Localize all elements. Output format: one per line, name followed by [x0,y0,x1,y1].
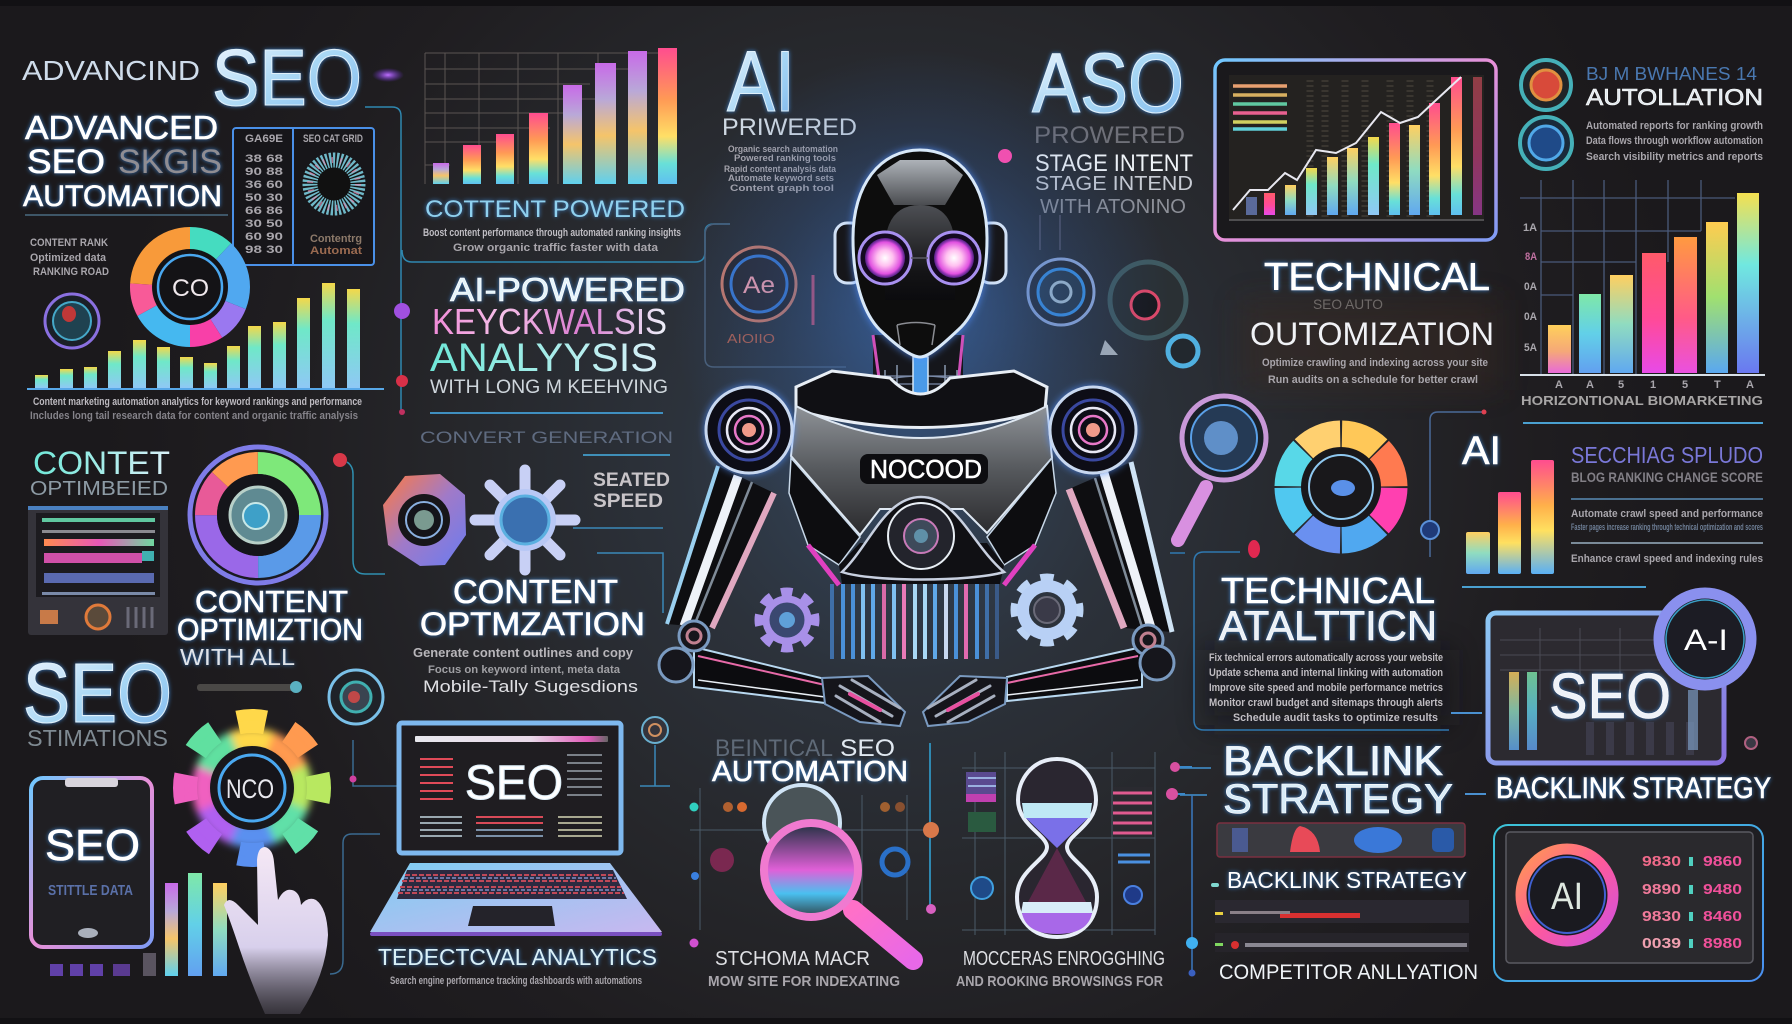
text block: chart caption: Content marketing automation analytics for keyword rankings and performance [33,396,362,408]
icon: dotted ring [310,160,358,208]
text block: content powered [423,196,685,254]
panel: data table with ring: 38 68 [245,153,283,165]
heading: content optimization centre: OPTMZATION [420,606,645,642]
panel: backlink strategy centre [1180,737,1478,984]
icon: purple blob [372,68,404,82]
heading: advanced seo automation [23,109,222,213]
icons: automation badges [1520,60,1572,169]
icon: AI magnifier ring [1659,593,1751,685]
text block: small centre-left copy: Automate keyword sets [728,173,834,183]
icon: octagon shield [383,474,466,566]
metric rows: 9480 [1703,881,1742,898]
panel: data table with ring [233,128,374,265]
heading: technical outomization: Optimize crawling and indexing across your site [1262,357,1488,369]
text block: chart caption [30,396,362,422]
text block: small centre-left copy [724,144,838,193]
bars [1246,77,1482,215]
text block: speed list [1571,442,1763,565]
text block: content powered: Boost content performance through automated ranking insights [423,227,681,239]
connector: bottom-right pink nodes [1166,762,1192,800]
text block: small centre-left copy: Powered ranking tools [734,153,836,163]
text block: technical analytics: TEDECTCVAL ANALYTICS [378,944,657,970]
text block: automation [1586,64,1763,163]
heading: content optimization centre: Generate content outlines and copy [413,645,634,660]
text block: automation: AUTOLLATION [1586,84,1763,110]
panel: AI circle left of robot: Ae [743,272,775,299]
robot: NOCOOD label: NOCOOD [870,454,982,484]
trend line [1233,77,1461,210]
text block: seated speed: SPEED [593,491,663,512]
chart: right rainbow bars: 5A [1524,342,1537,354]
text block: left notes: CONTENT RANK [30,237,108,249]
text block: left notes [30,237,109,278]
panel: phone: SEO [45,821,140,870]
robot: left forearm [694,647,825,703]
list left [966,772,996,899]
chart: right rainbow bars: 8A [1525,251,1537,263]
text block: chart caption right: HORIZONTIONAL BIOMARKETING [1521,393,1763,408]
title: ASO powered right: STAGE INTENT [1035,150,1193,177]
metric rows: 9830 [1642,908,1681,925]
panel: phone [31,778,152,947]
connector: centre branch [573,528,670,786]
panel: data table with ring: SEO CAT GRID [303,133,363,145]
illustration: hourglass with side lists [962,752,1155,937]
panel: technical attention [1170,540,1449,730]
chart: right rainbow bars: A [1746,379,1754,391]
icon: pink dot above robot [998,149,1012,163]
chart: right rainbow bars: 0A [1524,311,1537,323]
metric rows: 9830 [1642,853,1681,870]
metric rows: 9860 [1703,853,1742,870]
metric rows: 0039 [1642,935,1681,952]
panel: data table with ring: Automat [310,245,362,257]
heading: content optimization with all: WITH ALL [180,644,295,670]
icon: small round badge [329,670,383,724]
heading: AI-powered keyword analysis [430,271,685,398]
robot: elbow joints [659,621,1174,682]
text block: seated speed: SEATED [593,470,670,491]
panel: data table with ring: 36 60 [245,179,283,191]
heading: technical SEO automation [712,735,908,788]
text block: chart caption: Includes long tail research data for content and organic traffic analysis [30,410,358,422]
panel: backlink strategy centre: BACKLINK STRATEGY [1227,867,1467,893]
heading: advanced seo automation: SKGIS [118,143,222,181]
chart: phone side bars [50,873,227,976]
robot: ribs [832,584,997,659]
chart: colored wheel with eye [1288,434,1394,540]
heading: advancing: ADVANCIND [22,55,200,86]
heading: AI-powered keyword analysis: WITH LONG M KEEHVING [430,377,668,398]
icon: sun gear [475,470,575,570]
text block: technical analytics [378,944,657,987]
text block: small centre-left copy: Organic search automation [728,144,838,154]
heading: content optimization centre [413,573,645,696]
text block: technical analytics: Search engine performance tracking dashboards with automations [390,975,642,987]
text block: content powered: Grow organic traffic faster with data [453,242,659,254]
illustration: laptop [370,723,662,936]
heading: technical SEO automation: BEINTICAL [715,735,833,762]
gear body [204,740,300,836]
text block: content optimized left [30,445,170,500]
chart: right rainbow bars: 5 [1618,379,1624,391]
robot: left gear [760,593,814,647]
robot: right forearm [1007,647,1142,701]
robot: neck [845,335,1000,411]
panel: data table with ring: 30 50 [245,218,283,230]
panel: SEO monitor with AI magnifier: SEO [1549,660,1671,732]
text block: schema markup captions [708,948,1165,990]
chart: right rainbow bars: 1A [1523,222,1537,234]
heading: AI-powered keyword analysis: KEYCKWALSIS [432,301,667,342]
text block: automation: Search visibility metrics and reports [1586,151,1763,163]
panel: technical attention: Update schema and internal linking with automation [1209,667,1443,679]
illustration: laptop: SEO [465,757,563,810]
heading: content optimization with all: OPTIMIZTION [177,612,363,647]
heading: technical SEO automation: AUTOMATION [712,756,908,788]
heading: technical outomization [1250,256,1494,386]
chart: right rainbow bars: T [1714,379,1721,391]
panel: technical attention: Fix technical errors automatically across your website [1209,652,1443,664]
panel: data table with ring: 90 88 [245,166,283,178]
laptop: keyboard [397,870,627,899]
panel: phone: STITTLE DATA [48,882,133,899]
title: ASO powered right: PROWERED [1034,122,1185,149]
panel: data table with ring: 66 86 [245,205,283,217]
panel: AI circle left of robot: AIOIIO [727,331,775,346]
chart: right rainbow bars [1520,180,1765,391]
heading: technical outomization: Run audits on a schedule for better crawl [1268,374,1478,386]
heading: content optimization with all [177,584,363,670]
text block: automation: BJ M BWHANES 14 [1586,64,1757,84]
heading: advanced seo automation: AUTOMATION [23,180,222,213]
panel: SEO monitor with AI magnifier [1488,593,1757,763]
heading: SEO: SEO [212,33,362,122]
text block: speed list: Enhance crawl speed and indexing rules [1571,553,1763,565]
panel: data table with ring: Contentrg [310,233,362,245]
connector: wheel node [1421,410,1486,557]
chart: right rainbow bars: A [1555,379,1563,391]
icon: AI ring [1521,849,1613,941]
heading: content optimization centre: CONTENT [453,573,618,610]
title: AI powered: AI [727,34,795,130]
heading: technical outomization: OUTOMIZATION [1250,316,1494,352]
chart: right rainbow bars: A [1586,379,1594,391]
text block: left notes: Optimized data [30,252,107,264]
icon: rainbow gear with NCO [185,721,319,855]
connector: left vertical with nodes [365,107,730,415]
chart: top centre rainbow bars [425,48,677,184]
small row [1215,933,1469,952]
icon strip [1217,823,1465,857]
laptop: lines [420,755,602,836]
heading: big SEO and stimations: SEO [23,646,172,740]
icon: right circle and dark machine [1028,215,1198,366]
title: AI powered [722,34,857,141]
heading: content optimization with all: CONTENT [195,584,348,619]
text block: schema markup captions: AND ROOKING BROWSINGS FOR [956,973,1163,990]
panel: technical attention: Schedule audit tasks to optimize results [1233,712,1438,724]
connector: left node path [333,453,385,574]
icon: small lens circle [45,294,99,348]
panel: content rows [28,506,168,635]
icon: AI magnifier ring: A-I [1684,624,1728,657]
panel: backlink strategy centre: BACKLINK [1223,737,1443,784]
icon: rainbow gear with NCO: NCO [226,774,274,804]
text block: left notes: RANKING ROAD [33,266,109,278]
heading: technical outomization: TECHNICAL [1264,256,1490,299]
title: ASO powered right: ASO [1032,36,1184,130]
title: ASO powered right: STAGE INTEND [1035,173,1193,195]
icon: AI ring: AI [1551,876,1583,918]
text block: seated speed [593,470,670,512]
metric rows: 8980 [1703,935,1742,952]
text block: schema markup captions: MOCCERAS ENROGGHING [963,948,1165,970]
text block: automation: Automated reports for ranking growth [1586,120,1763,132]
robot: torso [789,371,1056,585]
panel: technical attention: Monitor crawl budget and sitemaps through alerts [1209,697,1443,709]
chart: donut with CO [142,239,238,335]
text block: schema markup captions: MOW SITE FOR INDEXATING [708,973,900,990]
heading: AI-powered keyword analysis: AI-POWERED [450,271,685,308]
robot: eyes [859,232,980,284]
metric rows: 8460 [1703,908,1742,925]
panel: data table with ring: GA69E [245,133,283,145]
title: ASO powered right: WITH ATONINO [1040,196,1186,218]
hourglass body [1017,759,1097,937]
title: ASO powered right [1032,36,1193,218]
red progress row [1215,900,1469,923]
panel: backlink strategy centre: STRATEGY [1223,775,1453,822]
panel: backlink strategy centre: COMPETITOR ANLLYATION [1219,961,1478,984]
text block: schema markup captions: STCHOMA MACR [715,948,870,970]
text block: content optimized left: OPTIMBEIED [30,478,168,500]
panel: data table with ring: 60 90 [245,231,283,243]
icon: pointing hand [224,847,328,1014]
connectors: lower left [330,726,400,974]
chart: right rainbow bars: 0A [1524,281,1537,293]
chart: bottom-left bars [27,283,384,390]
list right [1113,787,1153,904]
heading: content optimization centre: Focus on keyword intent, meta data [428,664,621,676]
panel: AI circle left of robot [705,224,846,367]
robot: ears [835,223,1006,283]
robot: right upper arm [1069,462,1172,632]
heading: technical SEO automation: SEO [840,735,895,762]
icon: magnifier right [1178,396,1266,540]
panel: line chart dashboard [1215,60,1496,240]
title: AI powered: PRIWERED [722,114,857,141]
illustration: magnifier schema [690,743,939,960]
panel: data table with ring: 50 30 [245,192,283,204]
panel: technical attention: TECHNICAL [1221,570,1435,611]
metric rows: 9890 [1642,881,1681,898]
text block: content generation faded: CONVERT GENERATION [420,428,673,447]
panel: technical attention: ATALTTICN [1219,602,1437,649]
faint table columns [1310,80,1430,220]
chart: big lens wheel [190,447,326,583]
heading: big SEO and stimations: STIMATIONS [27,725,168,751]
panel: data table with ring: 98 30 [245,244,283,256]
illustration: robot [620,40,1220,726]
heading: AI-powered keyword analysis: ANALYYSIS [430,336,658,380]
panel: AI ring metrics [1494,825,1763,981]
panel: technical attention: Improve site speed and mobile performance metrics [1209,682,1443,694]
robot: right gear [1017,580,1077,640]
robot: left hand [822,676,905,726]
panel: top-left SEO heading [22,33,404,213]
text block: content optimized left: CONTET [33,445,170,481]
text block: speed list: Automate crawl speed and performance [1571,508,1763,520]
heading: technical outomization: SEO AUTO [1313,296,1383,312]
chart: right rainbow bars: 1 [1650,379,1656,391]
metric rows [1642,853,1742,952]
heading: advanced seo automation: SEO [27,143,105,181]
AI label and small bars [1462,429,1554,574]
mini table [1233,86,1287,129]
text block: speed list: SECCHIAG SPLUDO [1571,442,1763,468]
chart: right rainbow bars: 5 [1682,379,1688,391]
robot: right hand [923,676,1007,726]
gear teeth [185,721,319,855]
text block: small centre-left copy: Rapid content analysis data [724,164,837,174]
AI label and small bars: AI [1462,429,1501,473]
icon: slider [197,681,302,693]
text block: content powered: COTTENT POWERED [425,196,685,223]
text block: small centre-left copy: Content graph tool [730,183,834,193]
heading: advanced seo automation: ADVANCED [25,109,218,146]
robot: left upper arm [667,466,774,628]
robot: shoulders [706,387,1136,473]
chart: donut with CO: CO [172,275,209,302]
heading: content optimization centre: Mobile-Tally Sugesdions [423,677,638,696]
robot: head [853,150,987,357]
icon: small emblem [642,717,668,743]
